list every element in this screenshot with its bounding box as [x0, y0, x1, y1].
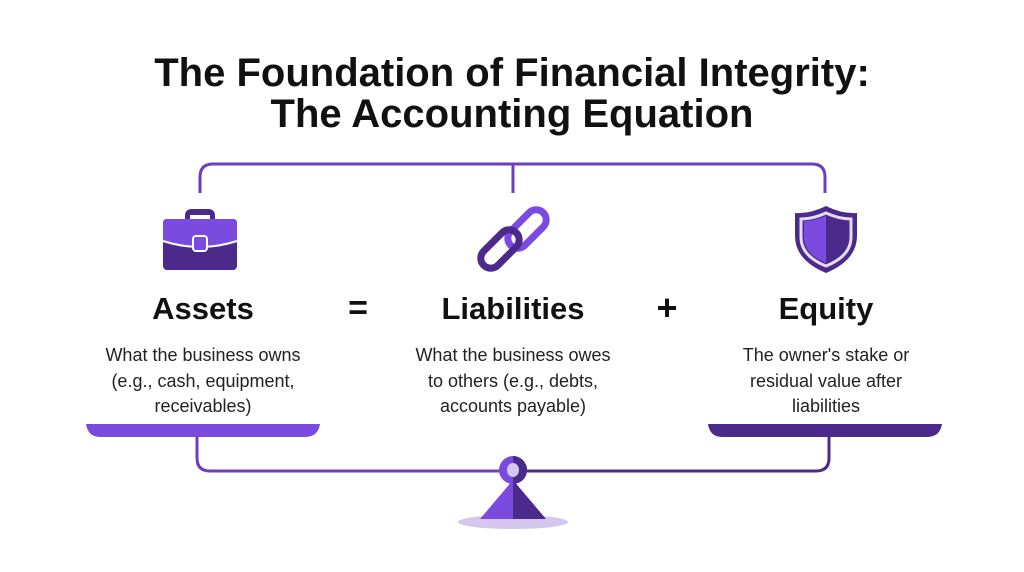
title: The Foundation of Financial Integrity:	[154, 51, 870, 95]
scale: right pan	[708, 424, 942, 437]
scale: fulcrum	[480, 456, 546, 519]
heading: Liabilities: Liabilities	[442, 291, 584, 326]
text: equity description	[743, 345, 909, 416]
text: equity description: liabilities	[792, 396, 860, 416]
text: liabilities description	[415, 345, 611, 416]
text: liabilities description: What the business owes	[415, 345, 611, 365]
top bracket	[200, 164, 825, 193]
text: equity description: The owner's stake or	[743, 345, 909, 365]
text: assets description	[105, 345, 301, 416]
text: liabilities description: accounts payable)	[440, 396, 586, 416]
text: assets description: What the business owns	[105, 345, 301, 365]
icon: shield	[795, 206, 857, 273]
title: The Accounting Equation	[271, 92, 753, 136]
icon: briefcase	[163, 209, 237, 270]
equals sign: =	[348, 289, 368, 327]
icon: chain link	[477, 206, 550, 272]
text: assets description: receivables)	[154, 396, 252, 416]
text: liabilities description: to others (e.g., debts,	[428, 371, 598, 391]
title	[154, 51, 870, 136]
scale: base shadow	[458, 515, 568, 529]
scale: left pan	[86, 424, 320, 437]
text: assets description: (e.g., cash, equipment,	[111, 371, 295, 391]
text: equity description: residual value after	[750, 371, 902, 391]
plus sign: +	[656, 287, 678, 328]
heading: Equity: Equity	[779, 291, 874, 326]
scale: beam	[197, 437, 829, 471]
heading: Assets: Assets	[152, 291, 254, 326]
